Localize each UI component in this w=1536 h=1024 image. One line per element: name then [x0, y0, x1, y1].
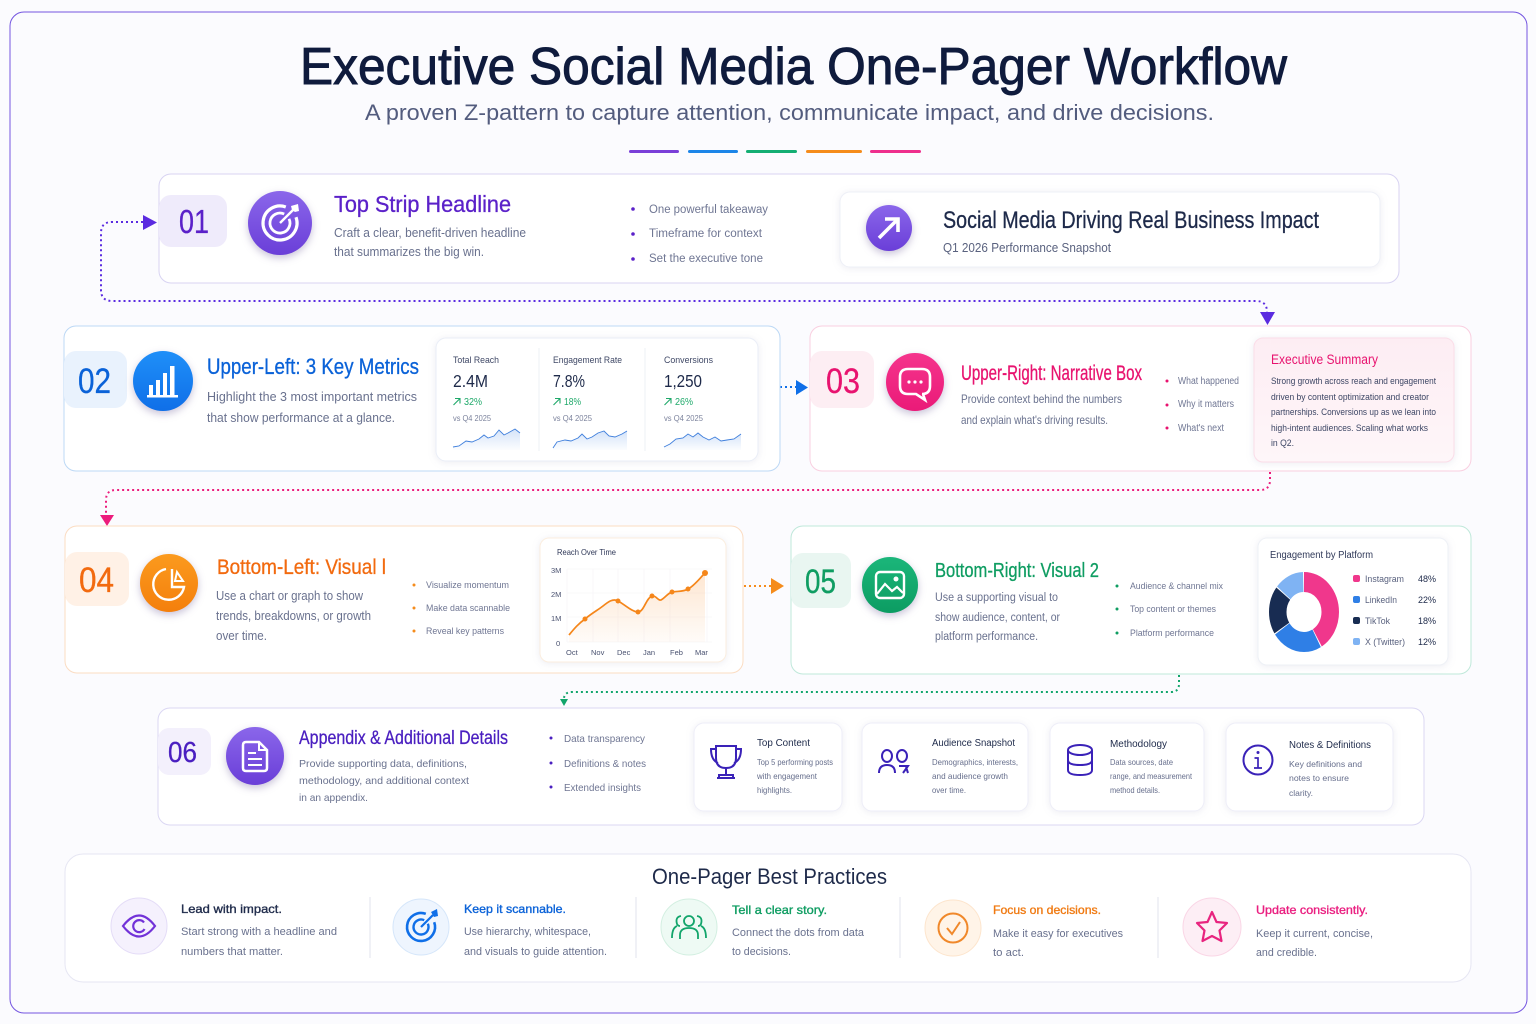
description: [334, 226, 526, 259]
heading: Bottom-Right: Visual 2: [935, 560, 1099, 582]
description: Use a supporting visual to: [935, 592, 1058, 604]
practice: tell a clear story: [661, 899, 865, 958]
mini card: methodology: Data sources, date: [1110, 757, 1173, 767]
headline example card: Q1 2026 Performance Snapshot: [943, 241, 1111, 255]
bullet list: Why it matters: [1178, 399, 1234, 410]
icon: document: [226, 727, 284, 785]
number badge 05: [791, 553, 851, 608]
mini card: methodology: range, and measurement: [1110, 771, 1193, 781]
description: Craft a clear, benefit-driven headline: [334, 226, 526, 240]
metric: total reach: 32%: [464, 397, 482, 408]
practice: update consistently: Update consistently.: [1256, 903, 1368, 917]
executive summary card: [1254, 338, 1454, 462]
metric: engagement rate: [553, 355, 627, 450]
mini card: top content: highlights.: [757, 785, 792, 795]
bullet list: Timeframe for context: [649, 228, 763, 240]
bullet list: Top content or themes: [1130, 604, 1216, 615]
line chart: reach over time: Dec: [617, 648, 631, 657]
executive summary card: partnerships. Conversions up as we lean into: [1271, 407, 1436, 417]
panel: 03 narrative box: [810, 326, 1471, 471]
bullet list: Extended insights: [564, 782, 641, 794]
executive summary card: in Q2.: [1271, 438, 1294, 448]
practice: lead with impact: Lead with impact.: [181, 902, 282, 916]
metric: total reach: Total Reach: [453, 355, 499, 366]
executive summary card: driven by content optimization and creator: [1271, 392, 1429, 402]
practice: focus on decisions: to act.: [993, 947, 1024, 959]
icon: eye: [111, 898, 167, 954]
practice: update consistently: [1183, 898, 1373, 959]
arrow: step 1 to step 2: [101, 215, 1275, 325]
line chart: reach over time: 0: [556, 639, 560, 648]
number badge 03: 03: [826, 362, 860, 401]
bullet list: Reveal key patterns: [426, 626, 504, 637]
donut legend: X (Twitter): [1365, 637, 1405, 647]
colour divider bars: [629, 150, 921, 153]
practice: update consistently: Keep it current, concise,: [1256, 928, 1373, 940]
description: Highlight the 3 most important metrics: [207, 389, 417, 404]
description: [961, 392, 1122, 427]
mini card: audience snapshot: Demographics, interests,: [932, 757, 1018, 767]
headline example card: [840, 192, 1380, 267]
arrow: step 2 to step 3: [780, 380, 808, 395]
heading: Top Strip Headline: [334, 191, 511, 217]
description: methodology, and additional context: [299, 775, 469, 787]
mini card: methodology: Methodology: [1110, 739, 1167, 750]
bullet list: [1116, 581, 1223, 639]
description: [935, 592, 1060, 643]
executive summary card: Executive Summary: [1271, 352, 1378, 367]
icon: image: [862, 557, 918, 613]
bullet list: Audience & channel mix: [1130, 581, 1223, 592]
metric: engagement rate: 18%: [564, 397, 581, 408]
icon: database: [1068, 745, 1092, 775]
mini card: notes and definitions: [1226, 723, 1393, 811]
heading: Bottom-Left: Visual l: [217, 556, 386, 579]
executive summary card: Strong growth across reach and engagement: [1271, 376, 1436, 386]
icon: arrow up right: [866, 205, 912, 251]
practice: tell a clear story: Tell a clear story.: [732, 903, 827, 917]
bullet list: [550, 733, 646, 794]
icon: target: [393, 899, 449, 955]
description: Use a chart or graph to show: [216, 589, 364, 603]
metric: conversions: [664, 355, 741, 450]
number badge 02: [64, 351, 127, 408]
line chart: reach over time: 3M: [551, 566, 561, 575]
mini card: audience snapshot: [862, 723, 1028, 811]
line chart: reach over time: Mar: [695, 648, 708, 657]
subtitle: A proven Z-pattern to capture attention, communicate impact, and drive decisions.: [365, 100, 1214, 125]
bullet list: Data transparency: [564, 733, 646, 745]
line chart: reach over time: 1M: [551, 614, 561, 623]
panel: 02 three key metrics: [64, 326, 780, 471]
panel: 06 appendix: [158, 708, 1424, 825]
mini card: top content: Top 5 performing posts: [757, 757, 833, 767]
mini card: audience snapshot: Audience Snapshot: [932, 738, 1015, 749]
number badge 04: 04: [79, 561, 114, 600]
metric: conversions: Conversions: [664, 355, 713, 366]
icon: audience: [879, 750, 908, 773]
donut legend: Instagram: [1365, 574, 1404, 584]
icon: target: [248, 191, 312, 255]
donut chart: engagement by platform: [1258, 538, 1448, 665]
number badge 03: [810, 351, 874, 408]
donut legend: LinkedIn: [1365, 595, 1397, 605]
bullet list: Visualize momentum: [426, 580, 509, 591]
metric: conversions: 26%: [675, 397, 693, 408]
executive summary card: high-intent audiences. Scaling what works: [1271, 423, 1428, 433]
mini card: notes and definitions: notes to ensure: [1289, 773, 1349, 783]
practice: lead with impact: numbers that matter.: [181, 946, 283, 958]
description: over time.: [216, 629, 267, 643]
practice: update consistently: and credible.: [1256, 947, 1317, 959]
mini card: audience snapshot: over time.: [932, 785, 966, 795]
mini card: audience snapshot: and audience growth: [932, 771, 1008, 781]
description: Provide context behind the numbers: [961, 392, 1122, 406]
metric: engagement rate: 7.8%: [553, 371, 585, 391]
donut legend: TikTok: [1365, 616, 1390, 626]
description: Provide supporting data, definitions,: [299, 758, 467, 770]
description: trends, breakdowns, or growth: [216, 609, 371, 623]
bullet list: Set the executive tone: [649, 253, 763, 265]
metric: engagement rate: Engagement Rate: [553, 355, 622, 366]
line chart: reach over time: Jan: [643, 648, 655, 657]
line chart: reach over time: 2M: [551, 590, 561, 599]
mini card: notes and definitions: Notes & Definitions: [1289, 740, 1371, 751]
mini card: methodology: method details.: [1110, 785, 1160, 795]
donut legend: 18%: [1418, 616, 1436, 626]
description: show audience, content, or: [935, 612, 1060, 624]
number badge 06: [158, 728, 211, 775]
line chart: reach over time: Feb: [670, 648, 683, 657]
best practices heading: One-Pager Best Practices: [652, 864, 887, 889]
donut chart: engagement by platform: Engagement by Platform: [1270, 550, 1373, 561]
practice: focus on decisions: Make it easy for executives: [993, 928, 1123, 940]
description: platform performance.: [935, 631, 1038, 643]
practice: keep it scannable: and visuals to guide attention.: [464, 946, 607, 958]
donut legend: 12%: [1418, 637, 1436, 647]
icon: pie chart: [140, 554, 198, 612]
practice: lead with impact: [111, 898, 337, 958]
metric: total reach: [453, 355, 520, 450]
practice: lead with impact: Start strong with a headline and: [181, 926, 337, 938]
practice: keep it scannable: [393, 899, 607, 958]
practice: focus on decisions: [925, 900, 1123, 959]
description: [207, 389, 417, 425]
bullet list: What happened: [1178, 376, 1239, 387]
number badge 04: [65, 552, 129, 606]
number badge 01: 01: [179, 203, 209, 240]
description: and explain what's driving results.: [961, 413, 1108, 427]
bullet list: Definitions & notes: [564, 758, 646, 770]
bullet list: [1166, 376, 1239, 434]
bullet list: What's next: [1178, 423, 1224, 434]
icon: trophy: [711, 746, 741, 778]
description: that show performance at a glance.: [207, 410, 395, 425]
bullet list: One powerful takeaway: [649, 204, 768, 216]
title: Executive Social Media One-Pager Workflow: [300, 38, 1287, 96]
practice: keep it scannable: Keep it scannable.: [464, 902, 566, 916]
description: that summarizes the big win.: [334, 245, 484, 259]
donut legend: 48%: [1418, 574, 1436, 584]
icon: info: [1244, 746, 1272, 774]
mini card: methodology: [1050, 723, 1204, 811]
panel: 05 visual 2: [791, 526, 1471, 674]
mini card: top content: with engagement: [756, 771, 818, 781]
description: [299, 758, 469, 804]
panel: best practices: [65, 854, 1471, 982]
icon: speech bubble: [886, 353, 944, 411]
arrow: step 3 to step 4: [100, 472, 1270, 526]
number badge 06: 06: [168, 737, 197, 769]
practice: tell a clear story: Connect the dots from data: [732, 927, 865, 939]
metrics card: [436, 338, 758, 461]
bullet list: Platform performance: [1130, 628, 1214, 639]
heading: Appendix & Additional Details: [299, 728, 508, 749]
arrow: step 5 to step 6: [560, 675, 1179, 706]
bullet list: Make data scannable: [426, 603, 510, 614]
bullet list: [631, 204, 768, 265]
line chart: reach over time: Reach Over Time: [557, 547, 616, 557]
mini card: notes and definitions: clarity.: [1289, 788, 1313, 798]
metric: conversions: 1,250: [664, 371, 702, 391]
donut rings: [1278, 582, 1330, 642]
line chart: reach over time: Nov: [591, 648, 605, 657]
donut legend: 22%: [1418, 595, 1436, 605]
line chart: reach over time: [540, 538, 726, 662]
arrow: step 4 to step 5: [744, 578, 784, 594]
icon: people: [661, 899, 717, 955]
icon: star: [1183, 898, 1241, 956]
panel: 04 visual 1: [65, 526, 743, 673]
metric: engagement rate: vs Q4 2025: [553, 413, 592, 423]
heading: Upper-Left: 3 Key Metrics: [207, 354, 419, 379]
practice: keep it scannable: Use hierarchy, whitespace,: [464, 926, 591, 938]
number badge 02: 02: [78, 362, 111, 401]
description: [216, 589, 371, 643]
number badge 01: [159, 195, 227, 247]
headline example card: Social Media Driving Real Business Impact: [943, 207, 1319, 234]
panel: 01 top strip headline: [159, 174, 1399, 283]
heading: Upper-Right: Narrative Box: [961, 362, 1142, 385]
donut legend: [1353, 574, 1436, 647]
number badge 05: 05: [805, 563, 836, 601]
metric: conversions: vs Q4 2025: [664, 413, 703, 423]
mini card: top content: [694, 723, 842, 811]
practice: tell a clear story: to decisions.: [732, 946, 791, 958]
mini card: notes and definitions: Key definitions and: [1289, 759, 1362, 769]
icon: check circle: [925, 900, 981, 956]
metric: total reach: vs Q4 2025: [453, 413, 491, 423]
description: in an appendix.: [299, 792, 368, 804]
practice: focus on decisions: Focus on decisions.: [993, 903, 1101, 917]
icon: bar chart: [133, 351, 193, 411]
bullet list: [412, 580, 510, 637]
mini card: top content: Top Content: [757, 738, 810, 749]
line chart: reach over time: Oct: [566, 648, 579, 657]
metric: total reach: 2.4M: [453, 371, 488, 391]
